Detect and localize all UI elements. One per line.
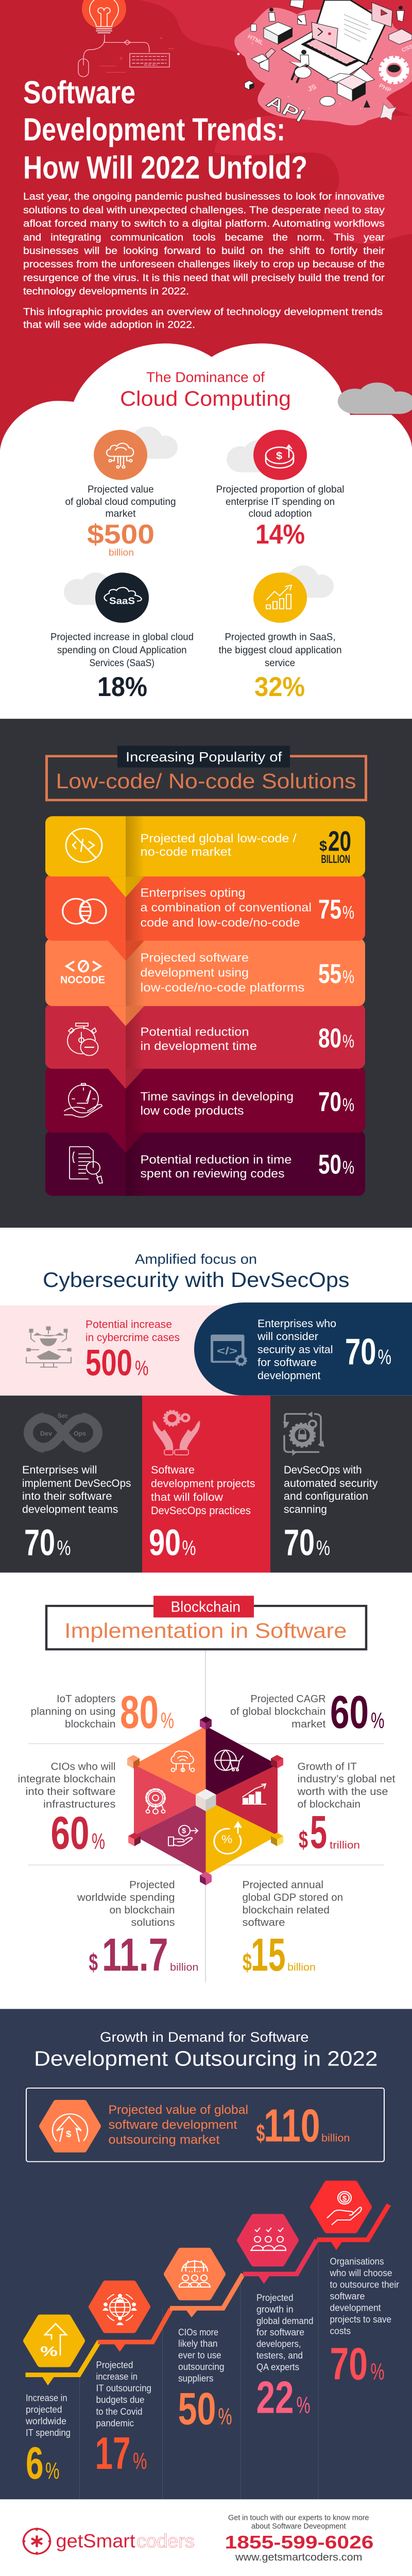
stat: SaaS spending: Services (SaaS) [90,658,154,669]
stat: automated security scanning: and configuration [284,1490,368,1502]
panel: blockchain [0,1572,412,2009]
stat: SaaS spending: Projected increase in global cloud [50,632,194,642]
callout: outsourcing market value: Projected value of global [109,2103,248,2117]
heading: increasing popularity of low-code no-code solutions: Low-code/ No-code Solutions [56,769,356,793]
stat: cybercrime cases [0,1306,247,1396]
step: IT outsourcing budgets: pandemic [96,2418,134,2429]
stat: SaaS spending: 18% [97,672,147,702]
stat: SaaS growth: the biggest cloud application [219,645,342,656]
panel: cybersecurity with DevSecOps [0,1228,412,1604]
stat: automated security scanning: automated security [284,1477,378,1489]
stat: DevSecOps practices: Software [151,1464,195,1476]
step: demand for developers: % [297,2392,311,2418]
step: organisations outsourcing to save costs: costs [330,2326,351,2336]
stat: SaaS growth: Projected growth in SaaS, [225,632,336,642]
stat: DevSecOps practices: 90 [149,1522,181,1563]
intro text block: businesses will be looking forward to build on the shift to fortify their [23,246,385,257]
stat: automated security scanning: % [316,1536,330,1560]
panel: cloud computing [0,344,412,719]
illustration: isometric software development platform [234,0,412,126]
callout: outsourcing market value: $ [66,2129,72,2139]
callout: outsourcing market value: software development [109,2118,237,2132]
step: organisations outsourcing to save costs: 70 [330,2339,368,2389]
icon: hands with gears [153,1411,200,1455]
intro text block: solutions to deal with unexpected challenges. The desperate need to stay [23,205,385,216]
row: combination of code approaches: % [342,902,354,923]
stat: blockchain CAGR: market [291,1718,326,1730]
stat: IT industry net worth: industry’s global net [298,1773,396,1785]
heading: blockchain implementation in software [46,1596,366,1649]
row: global low-code market: $ [319,839,327,854]
heading: the dominance of cloud computing [120,369,291,411]
heading: growth in demand for software development outsourcing [34,2029,377,2071]
stat: annual GDP on blockchain: billion [287,1961,316,1973]
row: combination of code approaches [45,874,365,961]
step: IT spending: Increase in [26,2393,67,2403]
stat: security as vital: for software [258,1356,317,1369]
decorative guides [205,1650,206,1982]
stat: SaaS spending: SaaS [109,596,135,606]
step: demand for developers: global demand [256,2315,313,2327]
title: How Will 2022 Unfold? [23,149,307,185]
stat: enterprise IT spending: 14% [255,520,305,550]
stat: implement DevSecOps: % [57,1536,71,1560]
icon: three people at laptops [250,2228,286,2250]
panel: footer [0,2499,412,2576]
step: IT outsourcing budgets [92,2283,171,2479]
stat: security as vital: will consider [257,1330,319,1343]
icons: hexagon segments [146,1750,266,1854]
row: development time: Potential reduction [140,1025,249,1039]
stat: automated security scanning: DevSecOps with [284,1464,362,1476]
contact details: Get in touch with our experts to know more [228,2514,369,2522]
step: IT spending: worldwide [25,2416,66,2427]
logo: getSmartCoders [23,2528,195,2555]
stat: annual GDP on blockchain: $ [243,1949,252,1976]
step: outsourcing suppliers: % [218,2403,232,2429]
row: development time: in development time [140,1040,257,1053]
stat: DevSecOps practices: that will follow [151,1491,224,1503]
row: review time: spent on reviewing codes [140,1167,285,1180]
step: organisations outsourcing to save costs: projects to save [330,2314,391,2325]
row: combination of code approaches: code and low-code/no-code [140,916,300,929]
stat: enterprise IT spending: enterprise IT spending on [226,496,335,507]
stat: worldwide spending: solutions [131,1916,175,1928]
person with laptop [289,49,311,83]
step: organisations outsourcing to save costs: to outsource their [330,2279,399,2290]
step: demand for developers: developers, [256,2338,301,2350]
stat: IT industry net worth [297,1760,396,1858]
heading: amplified focus on cybersecurity [43,1251,349,1292]
icon: DevSecOps infinity loop: Dev [40,1430,52,1437]
callout: outsourcing market value: $ [256,2120,265,2147]
logo: getSmartCoders: coders [136,2530,195,2552]
intro text block: and integrating communication tools became the norm. This year [23,232,385,243]
stat: worldwide spending: billion [170,1961,198,1973]
icon: hand with dollar [327,2192,362,2225]
stat: SaaS growth [219,565,342,702]
stat: cybercrime cases: 500 [85,1342,132,1383]
icon: crossed out code [66,828,102,862]
open box [327,67,374,101]
icon: dollar arrow [53,2114,88,2142]
icon: code window with gear: </> [217,1345,237,1357]
row: low-code platforms: Projected software [140,951,249,964]
decorative column lines [79,2242,318,2499]
woman on right platform [389,6,412,44]
stat: implement DevSecOps: into their software [22,1490,112,1502]
callout: outsourcing market value: outsourcing market [109,2133,220,2147]
stat: cloud market value [65,427,178,558]
stat: CIOs integrate blockchain: 60 [50,1807,90,1859]
step: demand for developers: Projected [256,2292,294,2303]
icon: globe with people [102,2294,137,2325]
stat: automated security scanning [270,1396,412,1572]
stat: blockchain CAGR: 60 [330,1686,369,1738]
step: IT outsourcing budgets: Projected [96,2360,133,2370]
intro text block: resurgence of the virus. It is this need that will precisely build the trend for [23,273,385,283]
row: review time: % [342,1157,354,1178]
heading: growth in demand for software development outsourcing: Development Outsourcing in 2022 [34,2047,377,2071]
stat: IT industry net worth: trillion [330,1839,360,1851]
platform tech labels: HTML [247,33,265,46]
step: IT outsourcing budgets: 17 [95,2429,131,2479]
step: outsourcing suppliers: CIOs more [178,2327,218,2338]
stat: IoT adopters: planning on using [31,1705,115,1717]
stat: worldwide spending [77,1878,199,1980]
stat: enterprise IT spending: cloud adoption [248,508,312,519]
icon: lock in gear with arrows [283,1412,324,1455]
stat: IT industry net worth: worth with the use [297,1786,388,1798]
callout: outsourcing market value: billion [321,2132,350,2144]
intro text block: This infographic provides an overview of technology development trends [23,307,383,317]
icon: percent arrow [45,2324,66,2355]
icon: stopwatch in hand [64,1083,102,1117]
step: outsourcing suppliers: outsourcing [178,2362,224,2372]
panel: header background [0,0,412,482]
intro text block: afloat forced many to switch to a digital platform. Automating workflows [23,218,385,229]
chart: hexagon: $ [182,1827,186,1835]
row: low-code platforms: 55 [318,959,341,989]
stat: SaaS growth: 32% [254,672,305,702]
row: global low-code market [45,816,365,897]
stat: enterprise IT spending [216,430,345,550]
stat: DevSecOps practices: DevSecOps practices [151,1504,251,1517]
step: IT outsourcing budgets: increase in [96,2371,138,2382]
icon: hacker [26,1327,71,1367]
stat: CIOs integrate blockchain [18,1760,115,1859]
stat: IoT adopters: % [161,1707,174,1733]
icon: corner cubes [127,1716,283,1885]
row: time savings [45,1066,365,1153]
heading: blockchain implementation in software: Implementation in Software [64,1619,347,1643]
glasses [251,48,276,72]
icon: DevSecOps infinity loop [27,1412,99,1452]
row: global low-code market: BILLION [321,853,350,866]
stat: cybercrime cases: Potential increase [85,1318,172,1331]
step: organisations outsourcing to save costs: software [330,2291,365,2302]
heading: increasing popularity of low-code no-code solutions [46,746,366,800]
callout: outsourcing market value [26,2088,384,2162]
icon: nocode [60,961,105,986]
step: organisations outsourcing to save costs: $ [342,2195,347,2202]
stat: DevSecOps practices: development projects [151,1477,255,1490]
icon: gray cloud [338,383,412,414]
step: IT spending: 6 [26,2438,43,2488]
stat: security as vital: development [258,1369,321,1382]
icon: stopwatch minus [67,1023,98,1056]
row: low-code platforms: % [342,967,354,987]
stat: security as vital [194,1302,412,1396]
API blocks: API [263,92,308,126]
stat: worldwide spending: $ [89,1949,98,1976]
stat: annual GDP on blockchain: blockchain related [242,1904,330,1916]
icon: light bulb with mouse and keyboard [78,0,174,77]
step: demand for developers: 22 [256,2372,294,2423]
icon: center cube [196,1789,216,1811]
platform tech labels: JS [306,83,318,93]
intro text block: technology developments in 2022. [23,286,189,297]
callout: outsourcing market value: 110 [264,2099,320,2151]
step: outsourcing suppliers: ever to use [178,2350,221,2361]
heading: the dominance of cloud computing: The Dominance of [146,369,265,385]
step: IT outsourcing budgets: to the Covid [96,2406,143,2417]
logo: getSmartCoders: getSmart [56,2530,135,2552]
stat: CIOs integrate blockchain: CIOs who will [50,1760,115,1772]
stat: worldwide spending: worldwide spending [77,1891,175,1903]
step: IT spending: % [45,2458,60,2484]
stat: cloud market value: billion [109,547,134,558]
stat: IT industry net worth: $ [299,1827,308,1854]
step: organisations outsourcing to save costs [313,2183,399,2389]
step: demand for developers: testers, and [256,2350,303,2361]
stat: implement DevSecOps: implement DevSecOps [22,1477,131,1489]
icon: DevSecOps infinity loop: Sec [58,1412,68,1419]
title [23,74,307,185]
stat: SaaS growth: service [265,658,295,669]
stat: security as vital: Enterprises who [258,1317,336,1330]
stat: implement DevSecOps: development teams [22,1503,118,1515]
step: organisations outsourcing to save costs: who will choose [330,2268,392,2279]
stat: worldwide spending: on blockchain [110,1904,175,1916]
intro text block: processes from the unforeseen challenges likely to crop up because of the [23,259,385,270]
step: organisations outsourcing to save costs: development [330,2302,381,2313]
stat: cloud market value: Projected value [88,484,153,495]
stat: IoT adopters: blockchain [65,1718,115,1730]
row: time savings: low code products [140,1104,244,1117]
contact details: about Software Deveopment [251,2522,346,2531]
step: IT spending: IT spending [26,2428,71,2438]
desk with sitting figure [251,8,293,44]
step: demand for developers: QA experts [256,2362,299,2372]
step: outsourcing suppliers: 50 [178,2384,216,2434]
row: time savings: Time savings in developing [140,1090,294,1104]
stat: blockchain CAGR: % [371,1707,384,1733]
stat: security as vital: security as vital [258,1343,333,1355]
stat: IT industry net worth: 5 [310,1806,327,1858]
stat: implement DevSecOps: 70 [24,1522,55,1563]
heading: the dominance of cloud computing: Cloud Computing [120,387,291,411]
icon: code document magnifier [70,1147,102,1183]
stat: cloud market value: of global cloud computing [65,496,176,507]
row: time savings: 70 [318,1087,341,1117]
step: outsourcing suppliers: suppliers [178,2373,213,2384]
row: development time [45,1004,365,1089]
row: low-code platforms: development using [140,966,249,979]
step: demand for developers: for software [256,2327,304,2338]
stat: worldwide spending: Projected [129,1878,175,1891]
row: development time: 80 [318,1023,341,1053]
step: demand for developers: growth in [256,2304,294,2315]
contact details: 1855-599-6026 [225,2532,374,2552]
stat: cloud market value: $500 [87,520,154,550]
step: IT spending: projected [26,2404,62,2415]
stat: CIOs integrate blockchain: infrastructures [43,1798,115,1810]
stat: annual GDP on blockchain: software [242,1916,285,1928]
stat: annual GDP on blockchain [242,1878,343,1980]
panel: low-code no-code [0,719,412,1228]
heading: amplified focus on cybersecurity: Amplified focus on [135,1251,257,1267]
title: Development Trends: [23,111,285,147]
step: IT outsourcing budgets: budgets due [96,2394,145,2405]
row: global low-code market: 20 [328,825,351,857]
stat: IoT adopters [31,1686,174,1738]
stat: enterprise IT spending: $ [276,450,282,462]
stat: annual GDP on blockchain: Projected annual [242,1878,323,1891]
row: global low-code market: no-code market [140,845,231,859]
step: IT outsourcing budgets: % [133,2448,147,2474]
heading: blockchain implementation in software: Blockchain [171,1599,241,1615]
row: time savings: % [342,1094,354,1115]
stat: blockchain CAGR [230,1686,384,1738]
stat: IoT adopters: IoT adopters [57,1692,116,1705]
row: combination of code approaches: Enterprises opting [140,886,245,900]
step: outsourcing suppliers [167,2250,243,2434]
heading: amplified focus on cybersecurity: Cybersecurity with DevSecOps [43,1268,349,1292]
stat: annual GDP on blockchain: 15 [251,1929,286,1980]
heading: growth in demand for software development outsourcing: Growth in Demand for Software [100,2029,309,2045]
stat: implement DevSecOps: Enterprises will [22,1464,97,1476]
stat: automated security scanning: 70 [284,1522,315,1563]
stat: IT industry net worth: Growth of IT [298,1760,357,1772]
stat: IoT adopters: 80 [120,1686,159,1738]
row: global low-code market: Projected global low-code / [140,832,297,845]
step: IT spending: % [40,2344,58,2359]
stat: implement DevSecOps [0,1396,142,1572]
panel: development outsourcing [0,2009,412,2500]
stat: security as vital: 70 [345,1331,376,1372]
icon: globe and group [179,2260,210,2287]
laptop [281,0,386,83]
row: combination of code approaches: a combination of conventional [140,901,312,914]
step: IT outsourcing budgets: IT outsourcing [96,2383,151,2394]
stat: SaaS spending [50,572,194,702]
contact details: www.getsmartcoders.com [235,2551,362,2563]
floating UI cards [290,0,392,27]
icon: nocode: NOCODE [60,974,105,986]
chart: hexagon: % [221,1833,232,1846]
stat: SaaS spending: spending on Cloud Application [57,645,186,656]
stat: annual GDP on blockchain: global GDP stored on [242,1891,343,1903]
stat: CIOs integrate blockchain: into their software [26,1786,115,1798]
icon: overlapping circles [63,899,106,924]
step: IT spending [25,2317,99,2488]
row: combination of code approaches: 75 [318,895,341,925]
stat: cybercrime cases: % [135,1357,149,1380]
step: organisations outsourcing to save costs: Organisations [330,2256,384,2267]
step: outsourcing suppliers: likely than [178,2338,218,2349]
intro text block [23,191,385,331]
stat: CIOs integrate blockchain: integrate blockchain [18,1773,115,1785]
stat: IT industry net worth: of blockchain [298,1798,360,1810]
step: organisations outsourcing to save costs: % [371,2359,385,2384]
stat: security as vital: % [378,1345,391,1369]
stat: worldwide spending: 11.7 [102,1929,168,1980]
stat: CIOs integrate blockchain: % [92,1828,105,1854]
stat: blockchain CAGR: of global blockchain [230,1705,325,1717]
step: demand for developers [240,2217,317,2423]
icon: DevSecOps infinity loop: Ops [74,1430,86,1437]
title: Software [23,74,135,110]
row: development time: % [342,1031,354,1052]
heading: increasing popularity of low-code no-code solutions: Increasing Popularity of [126,749,282,765]
row: low-code platforms: low-code/no-code platforms [140,981,305,994]
stat: blockchain CAGR: Projected CAGR [251,1692,326,1705]
stat: cloud market value: market [105,508,136,519]
small floating shapes [237,53,397,121]
platform tech labels: PHP [378,82,392,94]
contact details [225,2514,374,2563]
platform tech labels [247,33,412,94]
gear [382,59,406,81]
chart: hexagon [127,1716,283,1885]
row: review time [45,1130,365,1196]
row: review time: Potential reduction in time [140,1153,291,1166]
intro text block: Last year, the ongoing pandemic pushed businesses to look for innovative [23,191,385,202]
stat: DevSecOps practices: % [182,1536,196,1560]
row: review time: 50 [318,1150,341,1180]
stat: cybercrime cases: in cybercrime cases [85,1331,180,1344]
row: low-code platforms [45,938,365,1026]
intro text block: that will see wide adoption in 2022. [23,319,195,331]
stat: DevSecOps practices [142,1396,270,1572]
stat: automated security scanning: scanning [284,1503,327,1515]
icon: code window with gear [211,1334,246,1365]
stat: enterprise IT spending: Projected proportion of global [216,484,345,495]
